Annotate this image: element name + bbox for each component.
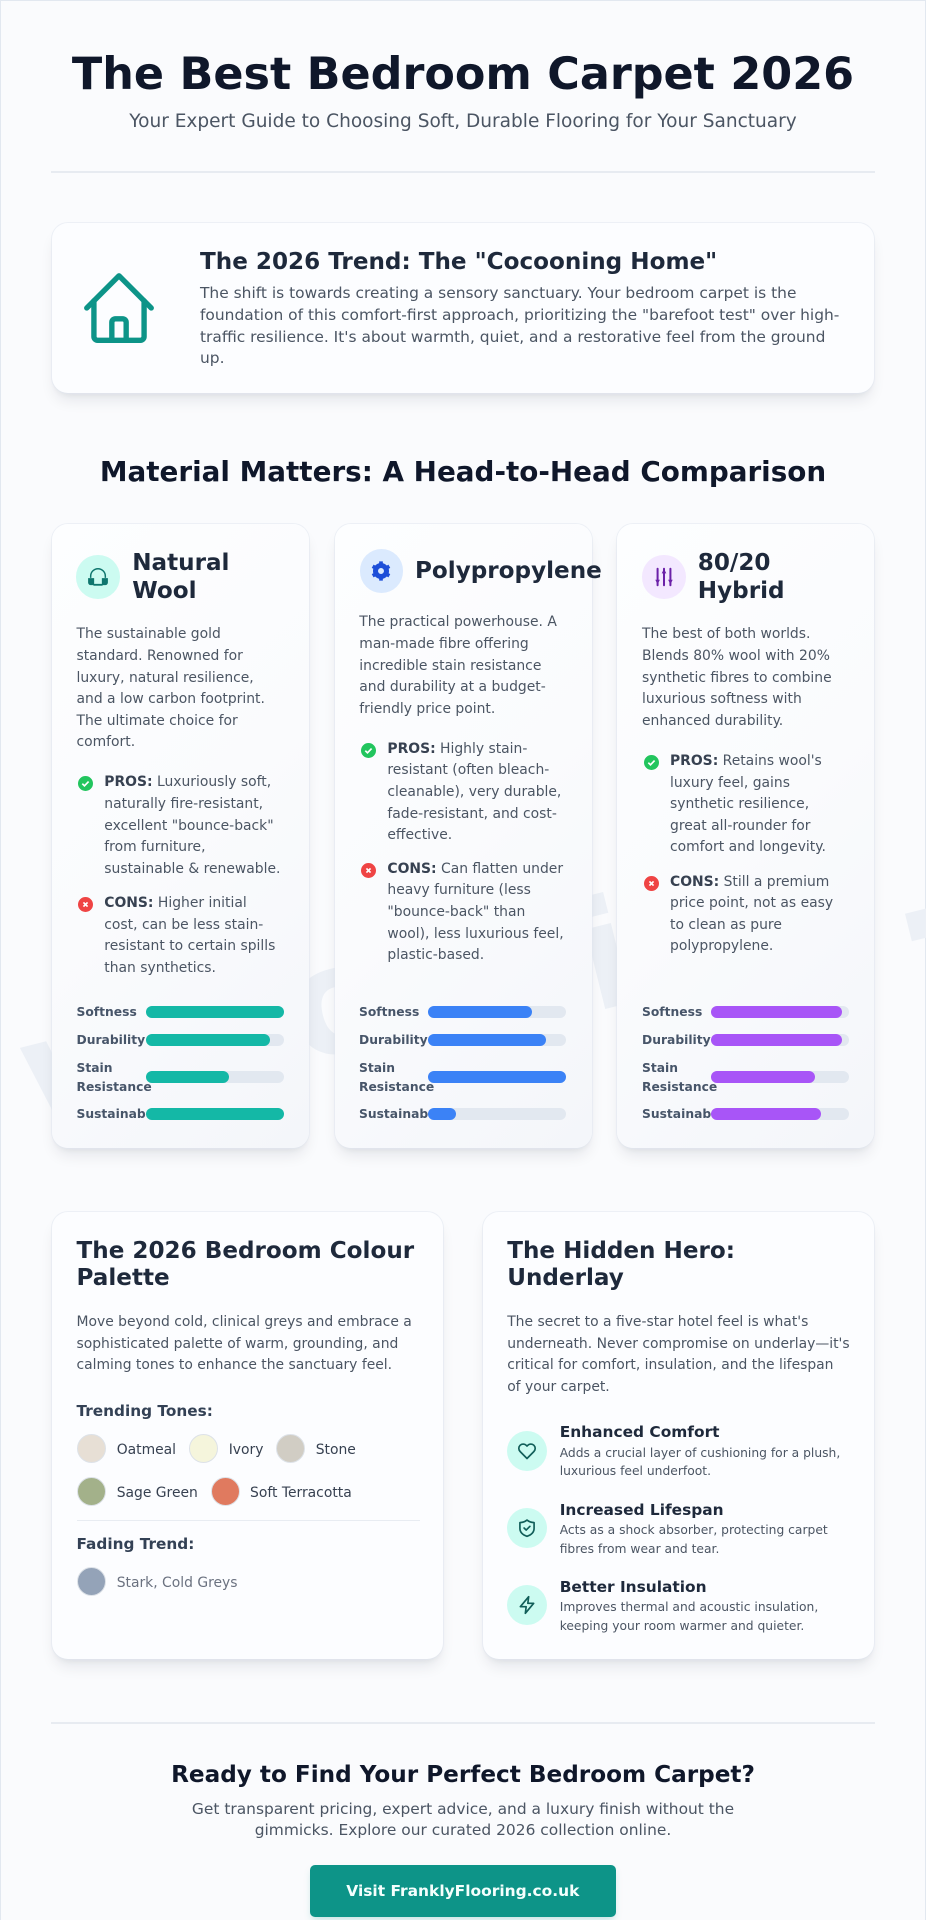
pros text: comfort and longevity. <box>670 839 826 855</box>
pros text: sustainable & renewable. <box>104 861 280 877</box>
cons text: resistant to certain spills <box>104 938 275 954</box>
description: The best of both worlds. <box>642 626 810 642</box>
label: oatmeal: Oatmeal <box>117 1442 176 1458</box>
icon: heart <box>507 1431 547 1471</box>
footer text: gimmicks. Explore our curated 2026 collection online. <box>255 1821 671 1839</box>
card title <box>698 550 785 604</box>
panel: 80/20 hybrid <box>617 524 874 1148</box>
description: luxury, natural resilience, <box>76 670 254 686</box>
label: Stain <box>359 1061 395 1075</box>
cons text <box>104 895 275 976</box>
bar <box>711 1034 849 1046</box>
icon: bolt <box>507 1585 547 1625</box>
label: Resistance <box>642 1080 717 1094</box>
bar <box>146 1006 284 1018</box>
card title: Polypropylene <box>415 558 602 584</box>
label: Durability <box>76 1033 145 1047</box>
underlay heading <box>507 1238 735 1291</box>
trend text: The shift is towards creating a sensory sanctuary. Your bedroom carpet is the <box>200 284 796 302</box>
bar <box>428 1034 566 1046</box>
label <box>359 1061 434 1094</box>
trend heading: The 2026 Trend: The "Cocooning Home" <box>200 249 717 275</box>
cons text: to clean as pure <box>670 917 782 933</box>
description: synthetic fibres to combine <box>642 670 832 686</box>
pros text: synthetic resilience, <box>670 796 809 812</box>
description <box>642 626 832 729</box>
description: enhanced durability. <box>642 713 783 729</box>
background watermark letters <box>9 797 926 1190</box>
benefit: better insulation <box>507 1576 852 1648</box>
description: incredible stain resistance <box>359 658 541 674</box>
bar chart: wool ratings <box>76 1005 284 1121</box>
trending tones heading: Trending Tones: <box>76 1402 213 1420</box>
bar <box>711 1006 849 1018</box>
card title <box>132 550 229 604</box>
palette heading: The 2026 Bedroom Colour <box>76 1238 414 1264</box>
label: sage green: Sage Green <box>117 1485 198 1501</box>
icon: cross <box>361 863 376 878</box>
label: Resistance <box>359 1080 434 1094</box>
pros text <box>387 741 561 843</box>
cons <box>78 895 275 976</box>
label: soft terracotta: Soft Terracotta <box>250 1485 352 1501</box>
palette text: sophisticated palette of warm, grounding, and <box>76 1336 398 1352</box>
swatch: sage green <box>77 1477 106 1506</box>
bar <box>711 1108 849 1120</box>
cons text: than synthetics. <box>104 960 216 976</box>
underlay text: The secret to a five-star hotel feel is what's <box>507 1314 808 1330</box>
benefit title: Increased Lifespan <box>560 1501 724 1519</box>
cons text: "bounce-back" than <box>387 904 525 920</box>
benefit text: Acts as a shock absorber, protecting carpet <box>560 1523 828 1537</box>
bar chart: polypropylene ratings <box>359 1005 566 1121</box>
trend text <box>200 284 839 367</box>
card title: Hybrid <box>698 578 785 604</box>
swatch: ivory <box>189 1434 218 1463</box>
bar <box>146 1071 284 1083</box>
underlay text: critical for comfort, insulation, and the lifespan <box>507 1357 833 1373</box>
benefit text <box>560 1446 840 1478</box>
palette text: Move beyond cold, clinical greys and embrace a <box>76 1314 412 1330</box>
underlay heading: Underlay <box>507 1265 624 1291</box>
benefit text: Improves thermal and acoustic insulation, <box>560 1600 818 1614</box>
label: Durability <box>642 1033 711 1047</box>
cons text <box>387 861 564 963</box>
description: and durability at a budget- <box>359 679 546 695</box>
cons text: cost, can be less stain- <box>104 917 263 933</box>
bar <box>146 1108 284 1120</box>
trend text: foundation of this comfort-first approach, prioritizing the "barefoot test" over high- <box>200 306 839 324</box>
panel: polypropylene <box>334 524 592 1148</box>
pros text: PROS: Retains wool's <box>670 753 822 769</box>
pros text: from furniture, <box>104 839 205 855</box>
panel: colour palette <box>52 1212 443 1659</box>
description: The sustainable gold <box>76 626 221 642</box>
description: man-made fibre offering <box>359 636 529 652</box>
description: comfort. <box>76 734 135 750</box>
description: The practical powerhouse. A <box>359 614 557 630</box>
label <box>76 1061 152 1094</box>
button: visit website: Visit FranklyFlooring.co.uk <box>346 1882 579 1900</box>
card title: Natural <box>132 550 229 576</box>
button: visit website <box>310 1865 616 1917</box>
bar chart: hybrid ratings <box>642 1005 849 1121</box>
bar <box>146 1034 284 1046</box>
icon: sliders <box>642 555 686 598</box>
background watermark letters: o <box>267 904 409 1098</box>
cons text <box>670 874 833 954</box>
trend text: traffic resilience. It's about warmth, quiet, and a restorative feel from the ground <box>200 328 825 346</box>
label: Softness <box>642 1005 702 1019</box>
description: luxurious softness with <box>642 691 802 707</box>
label: Softness <box>76 1005 137 1019</box>
fading trend heading: Fading Trend: <box>76 1535 194 1553</box>
label: Stain <box>76 1061 113 1075</box>
label: stark cold greys: Stark, Cold Greys <box>117 1575 238 1591</box>
label <box>642 1061 717 1094</box>
icon: wool <box>76 555 120 598</box>
icon: cross <box>644 876 659 891</box>
swatch: stone <box>276 1434 305 1463</box>
pros text <box>104 774 280 877</box>
benefit title: Better Insulation <box>560 1578 707 1596</box>
benefit text: fibres from wear and tear. <box>560 1542 719 1556</box>
pros <box>78 774 280 877</box>
pros text: PROS: Luxuriously soft, <box>104 774 271 790</box>
bar <box>428 1006 566 1018</box>
palette text <box>76 1314 412 1373</box>
cons text: CONS: Can flatten under <box>387 861 563 877</box>
pros text: cleanable), very durable, <box>387 784 561 800</box>
pros text: resistant (often bleach- <box>387 762 549 778</box>
label: Durability <box>359 1033 428 1047</box>
palette heading: Palette <box>76 1265 170 1291</box>
panel: natural wool <box>52 524 309 1148</box>
benefit text <box>560 1598 818 1635</box>
cons text: heavy furniture (less <box>387 882 531 898</box>
label: Resistance <box>76 1080 152 1094</box>
pros <box>644 753 826 855</box>
cons text: CONS: Still a premium <box>670 874 829 890</box>
palette text: calming tones to enhance the sanctuary feel. <box>76 1357 392 1373</box>
palette heading <box>76 1238 414 1291</box>
pros text: excellent "bounce-back" <box>104 818 274 834</box>
description <box>359 614 557 717</box>
panel: underlay <box>483 1212 874 1659</box>
pros text: fade-resistant, and cost- <box>387 806 557 822</box>
benefit text: Adds a crucial layer of cushioning for a plush, <box>560 1446 840 1460</box>
cons text: price point, not as easy <box>670 895 833 911</box>
bar <box>428 1108 566 1120</box>
label: stone: Stone <box>316 1442 356 1458</box>
footer text <box>0 1798 926 1842</box>
icon: cross <box>78 897 93 912</box>
cons text: CONS: Higher initial <box>104 895 247 911</box>
label: Stain <box>642 1061 678 1075</box>
benefit text: keeping your room warmer and quieter. <box>560 1619 804 1633</box>
icon: check <box>78 776 93 791</box>
background watermark letters: W <box>9 981 211 1190</box>
icon: house <box>84 273 154 343</box>
pros <box>361 741 561 843</box>
cons <box>644 874 833 954</box>
description: and a low carbon footprint. <box>76 691 265 707</box>
pros text: effective. <box>387 827 452 843</box>
cons text: plastic-based. <box>387 947 484 963</box>
icon: gear <box>360 549 403 592</box>
cons text: wool), less luxurious feel, <box>387 926 564 942</box>
pros text: luxury feel, gains <box>670 775 790 791</box>
benefit: enhanced comfort <box>507 1423 840 1478</box>
swatch: soft terracotta <box>211 1477 240 1506</box>
pros text: great all-rounder for <box>670 818 810 834</box>
icon: shield <box>507 1508 547 1548</box>
subtitle: Your Expert Guide to Choosing Soft, Durable Flooring for Your Sanctuary <box>129 111 797 132</box>
swatch: stark cold greys <box>77 1567 106 1596</box>
bar <box>428 1071 566 1083</box>
benefit text <box>560 1523 828 1556</box>
pros text <box>670 753 826 855</box>
underlay heading: The Hidden Hero: <box>507 1238 735 1264</box>
card title: Wool <box>132 578 196 604</box>
icon: check <box>361 743 376 758</box>
cons <box>361 861 564 963</box>
swatch: oatmeal <box>77 1434 106 1463</box>
description: standard. Renowned for <box>76 648 243 664</box>
bar <box>711 1071 849 1083</box>
panel: 2026 trend <box>52 223 874 393</box>
benefit text: luxurious feel underfoot. <box>560 1464 711 1478</box>
title: The Best Bedroom Carpet 2026 <box>72 49 854 100</box>
benefit title: Enhanced Comfort <box>560 1423 720 1441</box>
trend text: up. <box>200 349 224 367</box>
card title: 80/20 <box>698 550 771 576</box>
section heading: Material Matters: A Head-to-Head Comparison <box>100 455 826 488</box>
underlay text: of your carpet. <box>507 1379 610 1395</box>
pros text: PROS: Highly stain- <box>387 741 527 757</box>
pros text: naturally fire-resistant, <box>104 796 263 812</box>
benefit: increased lifespan <box>507 1501 828 1556</box>
label: ivory: Ivory <box>229 1442 263 1458</box>
icon: check <box>644 755 659 770</box>
cons text: polypropylene. <box>670 938 773 954</box>
footer heading: Ready to Find Your Perfect Bedroom Carpet? <box>171 1762 755 1788</box>
underlay text <box>507 1314 850 1395</box>
description <box>76 626 265 750</box>
underlay text: underneath. Never compromise on underlay—it's <box>507 1336 850 1352</box>
label: Softness <box>359 1005 419 1019</box>
description: The ultimate choice for <box>76 713 238 729</box>
description: Blends 80% wool with 20% <box>642 648 830 664</box>
footer text: Get transparent pricing, expert advice, and a luxury finish without the <box>192 1800 734 1818</box>
description: friendly price point. <box>359 701 495 717</box>
background watermark letters: i <box>560 866 652 1047</box>
